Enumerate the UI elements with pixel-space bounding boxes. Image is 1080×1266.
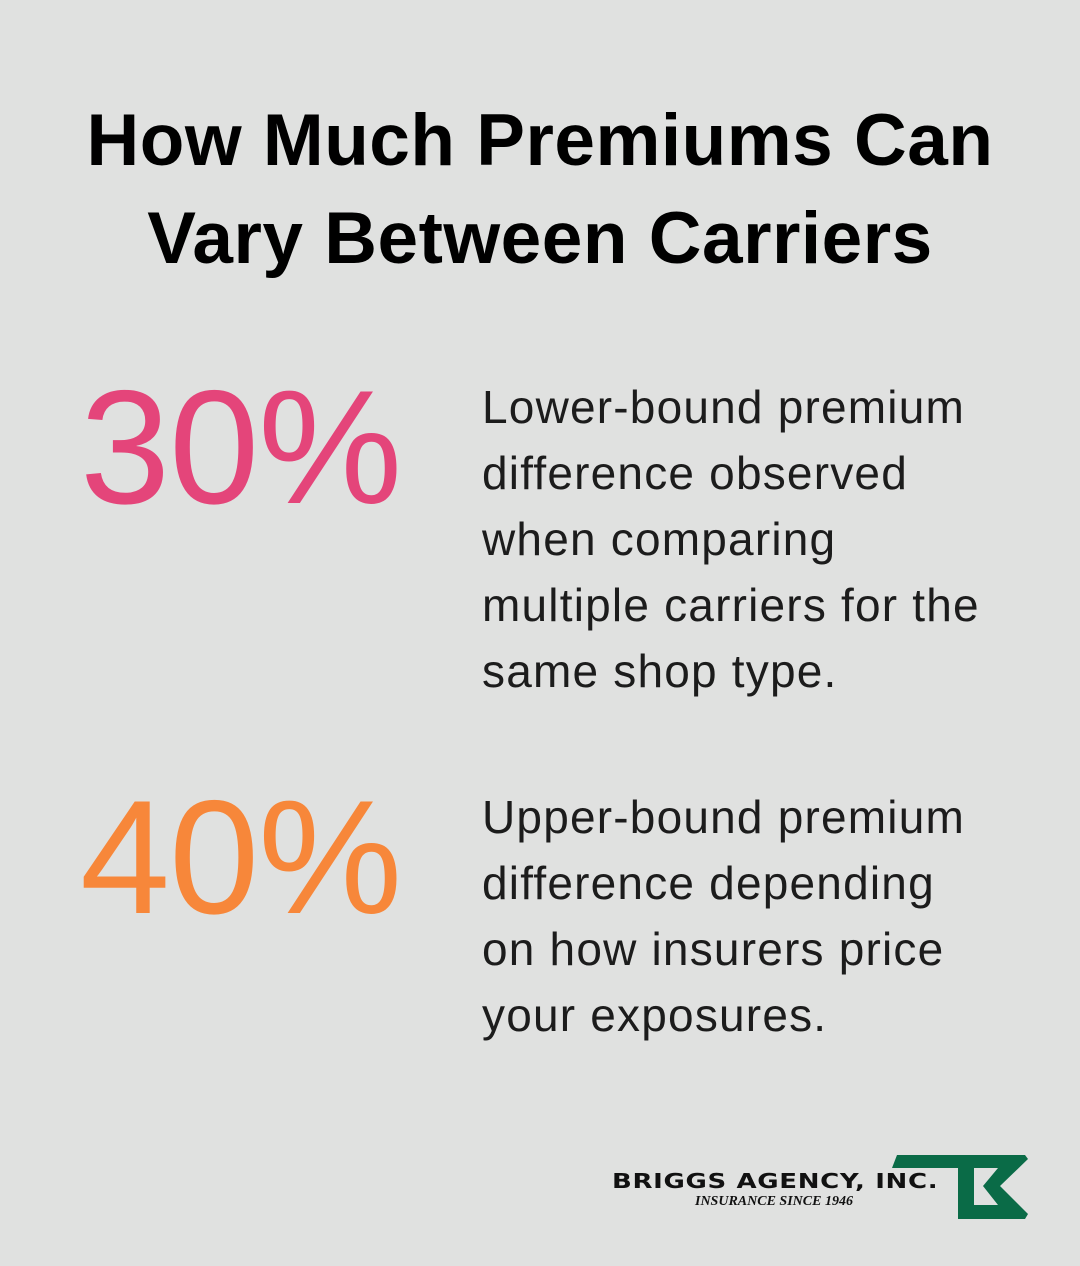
stat: 30%: 30% (80, 357, 401, 538)
text: 30% description (482, 381, 980, 697)
text: 40% description: Upper-bound premium (482, 791, 965, 843)
text: 40% description (482, 791, 965, 1041)
logo (612, 1155, 1028, 1219)
text: 30% description: Lower-bound premium (482, 381, 965, 433)
text: 30% description: when comparing (482, 513, 836, 565)
title (87, 100, 993, 279)
text: 40% description: difference depending (482, 857, 935, 909)
text: 30% description: same shop type. (482, 645, 838, 697)
icon: logo mark (892, 1155, 1028, 1219)
logo text: BRIGGS AGENCY, INC. (612, 1169, 938, 1193)
logo tagline: INSURANCE SINCE 1946 (695, 1194, 853, 1209)
text: 40% description: your exposures. (482, 989, 827, 1041)
text: 30% description: multiple carriers for the (482, 579, 980, 631)
stat: 40%: 40% (80, 767, 401, 948)
title: Vary Between Carriers (147, 198, 933, 279)
title: How Much Premiums Can (87, 100, 993, 181)
text: 30% description: difference observed (482, 447, 908, 499)
text: 40% description: on how insurers price (482, 923, 944, 975)
